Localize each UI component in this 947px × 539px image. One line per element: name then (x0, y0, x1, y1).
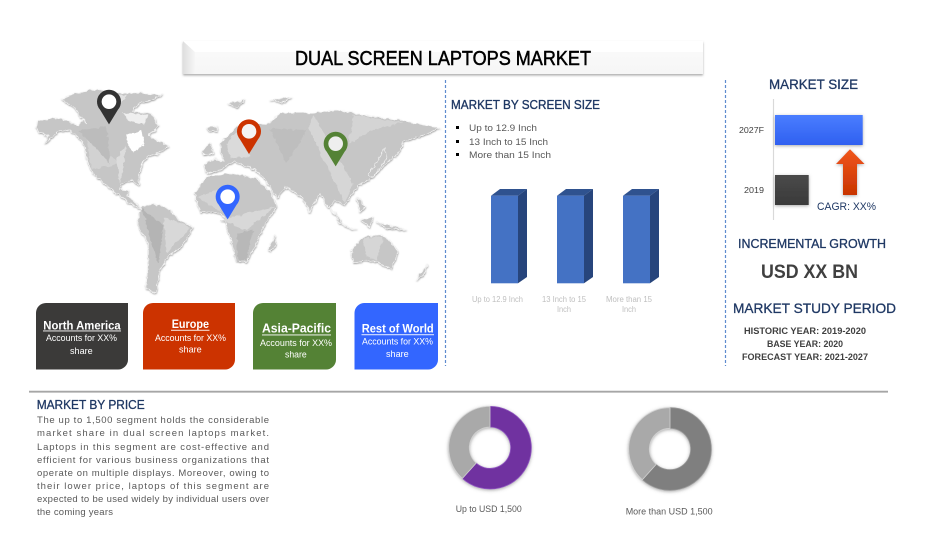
region card: Rest of World: share (386, 349, 409, 360)
region card: Asia-Pacific: Accounts for XX% (260, 338, 333, 349)
heading: market by screen size: MARKET BY SCREEN SIZE (451, 97, 600, 112)
pin: Europe (237, 119, 261, 154)
incremental growth: USD XX BN (761, 262, 858, 283)
bullet list: Up to 12.9 Inch (469, 123, 537, 134)
donut chart: up to USD 1,500: Up to USD 1,500 (456, 504, 522, 515)
heading: market size: MARKET SIZE (769, 76, 858, 92)
market study period: FORECAST YEAR: 2021-2027 (742, 352, 868, 363)
paragraph: expected to be used widely by individual users over (37, 494, 269, 505)
incremental growth (738, 237, 886, 283)
paragraph: their lower price, laptops of this segment are (37, 481, 269, 492)
heading: market by price: MARKET BY PRICE (37, 398, 145, 412)
horizontal bar chart: 2019 (744, 185, 764, 195)
world map (36, 89, 439, 293)
market study period: BASE YEAR: 2020 (767, 339, 843, 350)
paragraph: efficient for various business organizations that (37, 455, 269, 466)
market study period (733, 300, 896, 363)
panel: market by screen size (451, 97, 659, 314)
region card: North America: North America (43, 318, 121, 332)
region card: Europe: share (179, 344, 202, 356)
pin: North America (97, 90, 121, 124)
region card: Europe: Accounts for XX% (155, 333, 227, 344)
region card: North America: Accounts for XX% (46, 333, 118, 344)
paragraph: The up to 1,500 segment holds the considerable (37, 415, 269, 426)
region card: North America (36, 303, 128, 370)
paragraph: operate on multiple displays. Moreover, owing to (37, 468, 269, 479)
panel: market size (739, 76, 876, 220)
paragraph: market share in dual screen laptops market. (37, 428, 269, 439)
arrow: growth (836, 149, 864, 195)
bar chart: More than 15 (606, 295, 653, 304)
paragraph: the coming years (37, 507, 113, 518)
region card: Rest of World: Rest of World (362, 322, 434, 336)
region card: Europe (143, 303, 235, 370)
bar chart (472, 189, 659, 314)
donut chart: more than USD 1,500 (626, 408, 713, 518)
incremental growth: INCREMENTAL GROWTH (738, 237, 886, 251)
bar chart: Inch (557, 305, 571, 314)
region card: Asia-Pacific: Asia-Pacific (262, 321, 331, 336)
pin: Asia-Pacific (324, 132, 348, 166)
market study period: HISTORIC YEAR: 2019-2020 (744, 326, 866, 337)
region card: Asia-Pacific (253, 303, 336, 370)
bullet list: More than 15 Inch (469, 150, 551, 161)
horizontal bar chart: 2027F (739, 125, 764, 135)
region card: North America: share (70, 346, 93, 357)
bullet list: 13 Inch to 15 Inch (469, 137, 548, 148)
panel: market by price (37, 398, 269, 518)
CAGR label: CAGR: XX% (817, 201, 876, 213)
bullet list (456, 123, 551, 161)
region card: Rest of World: Accounts for XX% (362, 336, 434, 348)
region card: Asia-Pacific: share (285, 350, 307, 360)
bar chart: Inch (622, 305, 636, 314)
title banner (183, 41, 703, 74)
region card: Rest of World (354, 303, 438, 370)
region card: Europe: Europe (172, 317, 209, 331)
market study period: MARKET STUDY PERIOD (733, 300, 896, 316)
donut chart: more than USD 1,500: More than USD 1,500 (626, 506, 713, 518)
horizontal bar chart (739, 99, 863, 220)
bar chart: Up to 12.9 Inch (472, 295, 523, 304)
paragraph (37, 415, 269, 518)
donut chart: up to USD 1,500 (449, 406, 531, 515)
bar chart: 13 Inch to 15 (542, 295, 587, 304)
paragraph: Laptops in this segment are cost-effective and (37, 442, 269, 453)
pin: Rest of World (216, 185, 240, 219)
title banner: DUAL SCREEN LAPTOPS MARKET (295, 48, 591, 70)
